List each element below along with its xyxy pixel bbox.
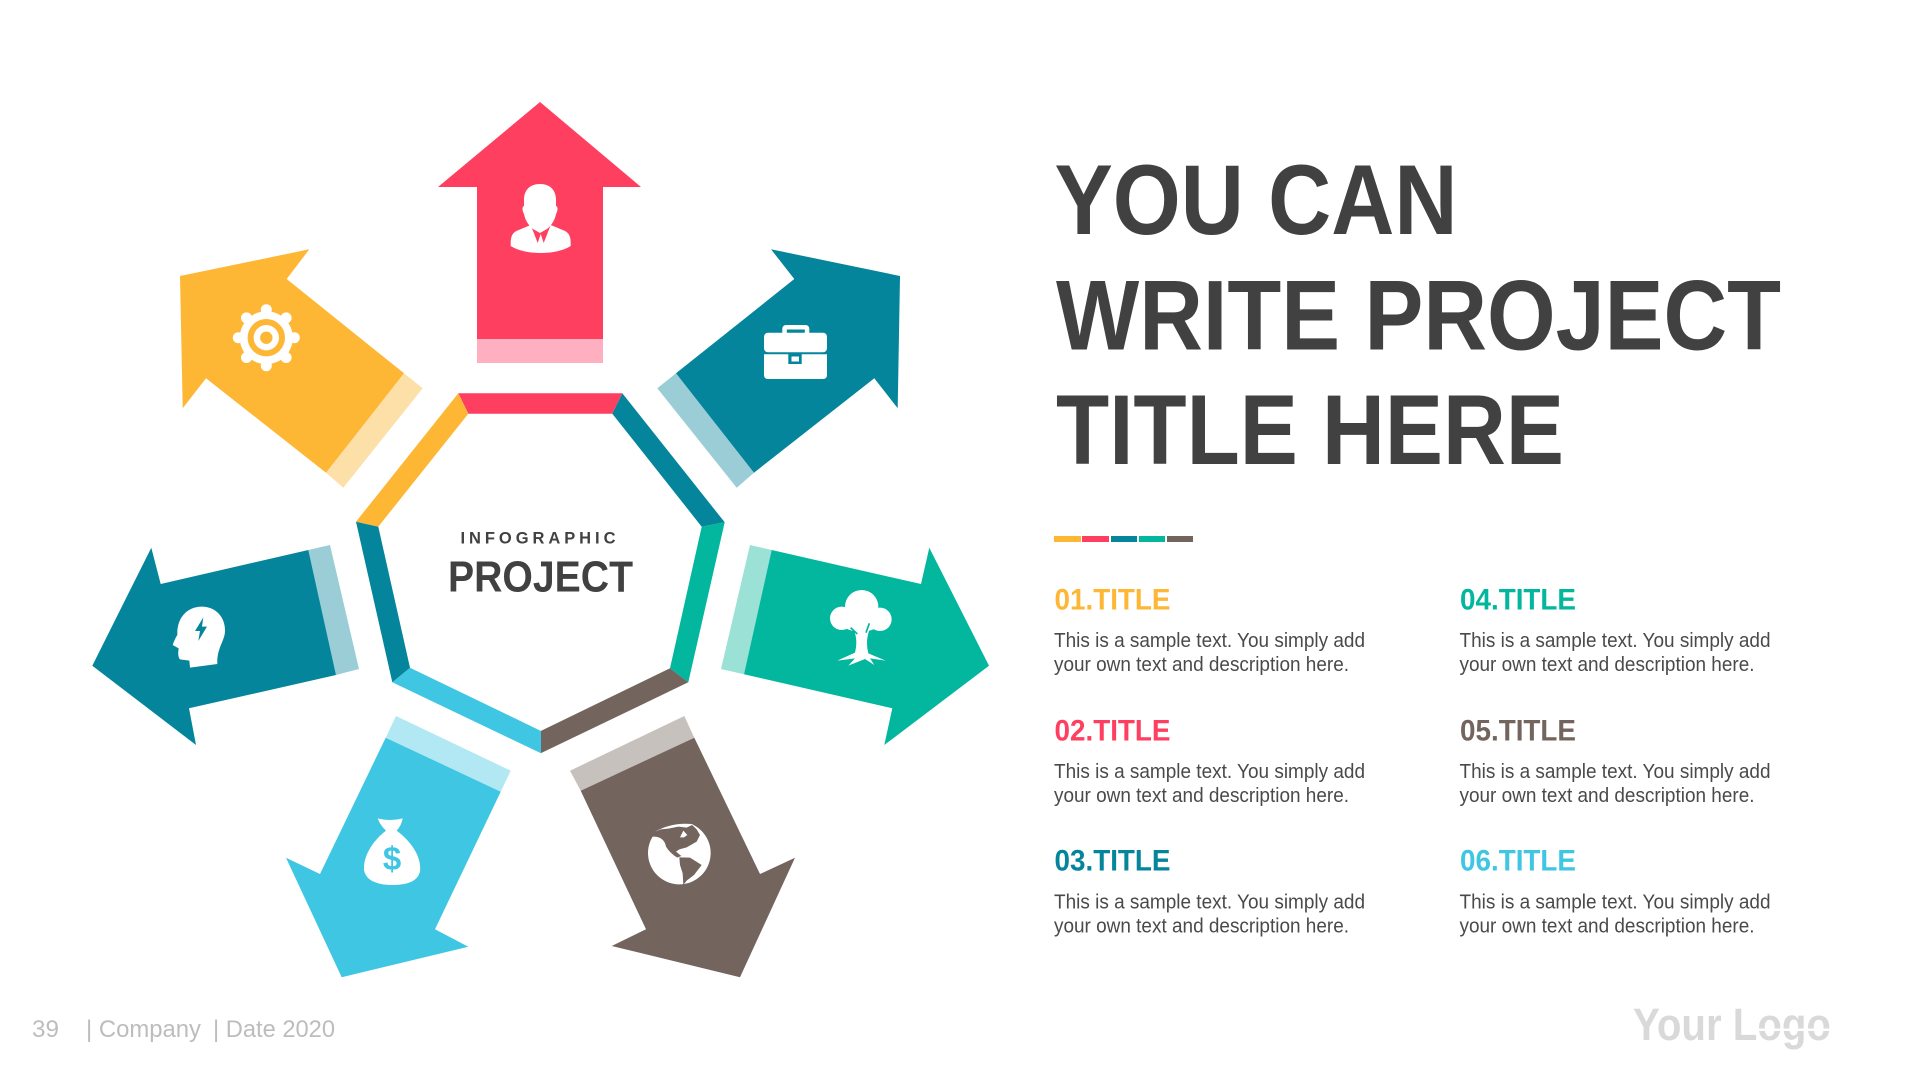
text block: 01: 01.TITLE [1054, 583, 1170, 616]
text block: 06: 06.TITLE [1460, 844, 1576, 877]
text block: 04 [1460, 583, 1770, 676]
text block: 05: This is a sample text. You simply add [1460, 761, 1770, 783]
arrow: red up [438, 102, 641, 363]
ring segment: teal right [612, 393, 725, 527]
text block: 01: This is a sample text. You simply add [1054, 630, 1365, 652]
icon: head with bolt [173, 607, 225, 668]
text block: 05: your own text and description here. [1460, 785, 1754, 807]
footer: | Company [86, 1016, 201, 1043]
text block: 03: This is a sample text. You simply add [1054, 891, 1365, 913]
text block: 01 [1054, 583, 1365, 676]
colour strip [1054, 536, 1193, 542]
ring segment: yellow [356, 393, 468, 527]
arrow: blue down-left [286, 716, 511, 977]
text block: 02: 02.TITLE [1054, 714, 1170, 747]
footer: | Date 2020 [213, 1016, 335, 1043]
text block: 04: 04.TITLE [1460, 583, 1576, 616]
icon: globe [648, 821, 711, 885]
footer [32, 1016, 335, 1043]
title: YOU CAN [1054, 144, 1458, 255]
ring segment: blue [392, 668, 541, 753]
text block: 03 [1054, 844, 1365, 938]
arrow: yellow up-left [180, 249, 423, 488]
center label: INFOGRAPHIC: INFOGRAPHIC [460, 530, 616, 548]
title [1054, 144, 1781, 485]
ring segment: red [458, 393, 622, 414]
center label: PROJECT: PROJECT [448, 553, 633, 601]
text block: 06 [1460, 844, 1770, 938]
icon: tree [830, 590, 892, 666]
heptagon ring [356, 393, 725, 753]
footer: 39 [32, 1016, 59, 1043]
icon: gear [233, 304, 300, 371]
title: TITLE HERE [1056, 374, 1564, 485]
text block: 06: This is a sample text. You simply add [1460, 891, 1770, 913]
ring segment: teal left [356, 522, 410, 682]
text block: 02: This is a sample text. You simply add [1054, 761, 1365, 783]
text block: 05: 05.TITLE [1460, 714, 1576, 747]
text block: 02 [1054, 714, 1365, 807]
ring segment: brown [541, 668, 688, 753]
text block: 04: your own text and description here. [1460, 654, 1754, 676]
icon: money bag [364, 818, 420, 885]
text block: 06: your own text and description here. [1460, 916, 1754, 938]
arrow: brown down-right [570, 716, 795, 977]
text block: 03: 03.TITLE [1054, 844, 1170, 877]
logo: Your Logo [1633, 999, 1831, 1050]
icon: briefcase [764, 325, 827, 379]
icon: businessman [511, 184, 571, 253]
arrow: teal up-right [657, 249, 900, 488]
text block: 05 [1460, 714, 1770, 807]
ring segment: green [670, 522, 725, 682]
title: WRITE PROJECT [1056, 259, 1781, 370]
arrow: green right [721, 545, 989, 745]
text block: 01: your own text and description here. [1054, 654, 1349, 676]
panel: arrow diagram [92, 102, 989, 977]
text block: 03: your own text and description here. [1054, 916, 1349, 938]
icon: money bag: $ [383, 840, 401, 877]
arrow: teal left [92, 545, 359, 745]
text block: 04: This is a sample text. You simply add [1460, 630, 1770, 652]
text block: 02: your own text and description here. [1054, 785, 1349, 807]
